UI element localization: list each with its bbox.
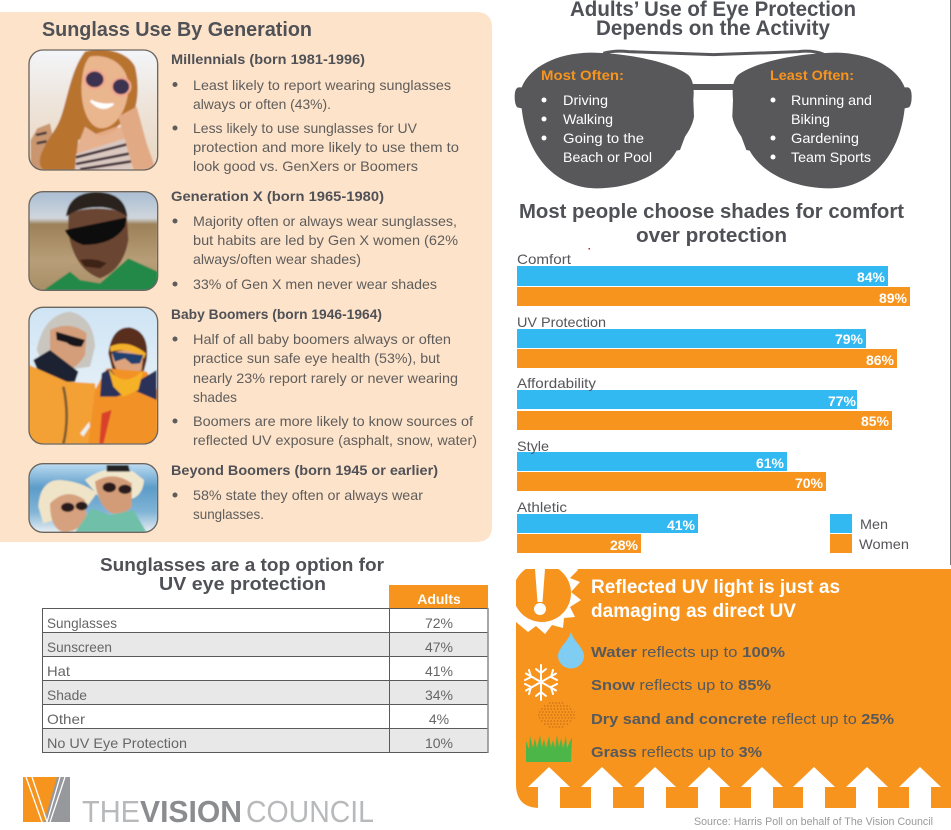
bar chart: reasons for choosing shades: 41% [667,517,696,533]
frame edge [950,0,951,565]
photo: beyond boomers couple [29,464,158,532]
text block: millennials [171,52,459,174]
text block: most often: Going to the [563,130,644,146]
heading: most people choose shades [519,201,904,247]
text block: most often: Beach or Pool [563,149,652,165]
text block: baby boomers: Boomers are more likely to know sources of [193,413,473,429]
text: snow: Snow reflects up to 85% [591,677,771,694]
panel: sunglass use by generation [0,12,492,542]
icon: snowflake [525,665,557,700]
heading: most people choose shades: over protection [636,225,787,247]
icon: logo mark [23,777,70,822]
table: UV eye protection options [42,585,488,753]
text block: generation x: 33% of Gen X men never wear shades [193,276,437,292]
icon: sand dots [538,703,576,727]
table: UV eye protection options: No UV Eye Protection [47,735,187,751]
bar chart: reasons for choosing shades: Comfort [517,251,571,267]
panel: reflected UV light [500,564,951,808]
table: UV eye protection options: 72% [425,615,453,631]
bar chart: reasons for choosing shades: 85% [861,413,890,429]
text block: baby boomers [171,307,477,448]
legend: Men [860,516,888,532]
text block: baby boomers: nearly 23% report rarely or never wearing [193,370,458,386]
text block: generation x: always/often wear shades) [193,251,361,267]
table: UV eye protection options: 41% [425,663,453,679]
text block: least often [770,67,872,165]
table: UV eye protection options: Other [47,711,85,727]
text block: millennials: protection and more likely to use them to [193,139,459,155]
heading: top option for UV eye protection: Sunglasses are a top option for [100,555,384,575]
heading: adults' use of eye protection: Depends on the Activity [596,17,830,40]
text block: least often: Team Sports [791,149,871,165]
heading: sunglass use by generation: Sunglass Use By Generation [42,19,312,41]
table: UV eye protection options: Shade [47,687,87,703]
table: UV eye protection options: 10% [425,735,453,751]
text block: generation x [171,189,458,292]
bar chart: reasons for choosing shades: 77% [828,393,857,409]
text block: generation x: Majority often or always wear sunglasses, [193,213,457,229]
bar chart: reasons for choosing shades: 28% [610,537,639,553]
table: UV eye protection options: Adults [417,591,461,607]
text block: baby boomers: reflected UV exposure (asphalt, snow, water) [193,432,477,448]
bar chart: reasons for choosing shades: UV Protection [517,314,606,330]
bar chart: reasons for choosing shades: 84% [857,269,886,285]
heading: adults' use of eye protection [570,0,856,40]
icon: water drop [558,632,584,668]
legend [830,514,909,553]
text block: millennials: Millennials (born 1981-1996) [171,52,365,67]
text block: least often: Gardening [791,130,859,146]
text block: least often: Least Often: [770,67,854,83]
text: sand and concrete: Dry sand and concrete reflect up to 25% [591,711,894,728]
text block: baby boomers: Half of all baby boomers always or often [193,331,451,347]
source note: Source: Harris Poll on behalf of The Vision Council [694,816,933,828]
heading: reflected UV light [591,577,840,622]
table: UV eye protection options: 47% [425,639,453,655]
text block: beyond boomers [171,463,438,522]
text block: generation x: but habits are led by Gen X women (62% [193,232,458,248]
bar chart: reasons for choosing shades: 70% [795,475,824,491]
bar chart: reasons for choosing shades: Affordability [517,375,596,391]
photo: baby boomers couple [29,307,158,444]
logo: the vision council: COUNCIL [246,794,374,829]
text block: baby boomers: practice sun safe eye health (53%), but [193,350,440,366]
text block: baby boomers: Baby Boomers (born 1946-1964) [171,307,382,322]
text block: least often: Running and [791,92,872,108]
text block: millennials: Least likely to report wearing sunglasses [193,77,451,93]
text block: most often: Most Often: [541,67,624,83]
heading: top option for UV eye protection: UV eye protection [159,574,326,594]
text block: beyond boomers: sunglasses. [193,506,264,522]
icon: grass [526,735,572,762]
bar chart: reasons for choosing shades: 86% [866,352,895,368]
text block: least often: Biking [791,111,830,127]
logo: the vision council: VISION [140,794,242,829]
bar chart: reasons for choosing shades: Style [517,438,549,454]
text block: most often [541,67,652,165]
table: UV eye protection options: 34% [425,687,453,703]
text block: baby boomers: shades [193,389,237,405]
photo: millennial woman [29,50,158,170]
text block: most often: Walking [563,111,613,127]
table: UV eye protection options: Sunglasses [47,615,117,631]
table: UV eye protection options: Sunscreen [47,639,112,655]
icon: sun with exclamation mark [516,569,581,634]
text: grass: Grass reflects up to 3% [591,744,762,761]
arrows: reflected light [528,767,941,808]
icon: aviator sunglasses [515,51,912,188]
table: UV eye protection options: Hat [47,663,70,679]
bar chart: reasons for choosing shades [517,251,910,553]
text block: millennials: always or often (43%). [193,96,331,112]
text block: beyond boomers: Beyond Boomers (born 1945 or earlier) [171,463,438,478]
legend: Women [859,536,909,552]
text block: generation x: Generation X (born 1965-1980) [171,189,384,204]
text: water: Water reflects up to 100% [591,644,785,661]
bar chart: reasons for choosing shades: Athletic [517,499,567,515]
logo: the vision council [23,777,374,829]
text block: most often: Driving [563,92,608,108]
heading: most people choose shades: Most people choose shades for comfort [519,201,904,223]
bar chart: reasons for choosing shades: 61% [756,455,785,471]
bar chart: reasons for choosing shades: 79% [835,331,864,347]
text block: millennials: Less likely to use sunglasses for UV [193,120,418,136]
heading: reflected UV light: Reflected UV light is just as [591,577,840,598]
heading: top option for UV eye protection [100,555,384,594]
text block: millennials: look good vs. GenXers or Boomers [193,158,418,174]
text block: beyond boomers: 58% state they often or always wear [193,487,423,503]
bar chart: reasons for choosing shades: 89% [879,290,908,306]
logo: the vision council: THE [82,794,140,829]
photo: generation x man [29,192,158,290]
heading: reflected UV light: damaging as direct UV [591,601,796,622]
table: UV eye protection options: 4% [429,711,449,727]
